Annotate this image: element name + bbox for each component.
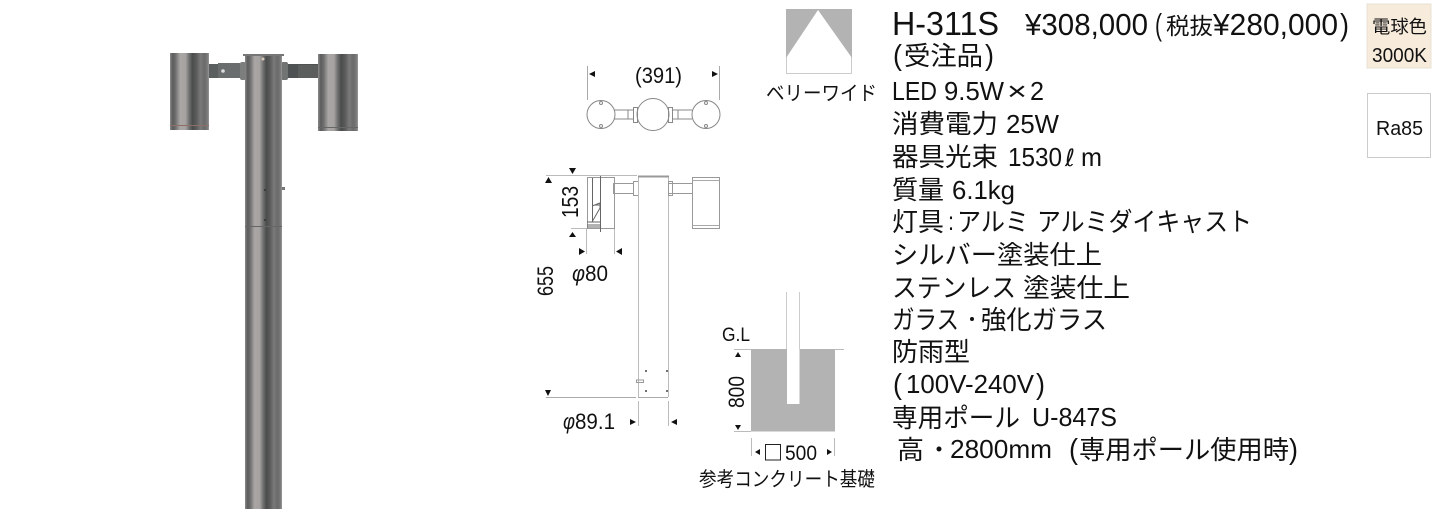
power use: 消費電力: [892, 104, 998, 141]
height: 2800mm: [950, 434, 1052, 464]
weight: 質量: [892, 170, 944, 207]
glass: ガラス: [892, 300, 959, 337]
height: [897, 430, 1298, 467]
side elevation drawing: [545, 168, 720, 426]
product photo: pole light: [170, 53, 358, 509]
wattage: LED: [892, 76, 937, 106]
finish 2: 塗装仕上: [1023, 268, 1130, 305]
material 1: [892, 202, 1252, 239]
dimension: 655: 655: [533, 266, 558, 296]
dimension: phi 80: 80: [585, 261, 608, 286]
model and price: ¥308,000: [1024, 7, 1148, 42]
label: G.L: G.L: [722, 325, 750, 346]
model and price: (: [1155, 7, 1162, 42]
luminous flux: ℓ: [1064, 144, 1075, 172]
model and price: [892, 5, 1349, 42]
beam angle label: ベリーワイド: [766, 83, 877, 105]
voltage: 100V-240V: [906, 369, 1035, 399]
concrete block: [751, 349, 835, 432]
finish 2: [892, 268, 1130, 305]
dedicated pole: 専用ポール: [892, 398, 1020, 435]
material 1: 灯具: [892, 202, 944, 239]
voltage: ): [1036, 369, 1045, 401]
material 1: アルミ: [957, 202, 1029, 239]
model and price: H-311S: [892, 5, 999, 42]
left lamp head: [170, 53, 209, 130]
wattage: 2: [1030, 76, 1044, 106]
dedicated pole: [892, 398, 1117, 435]
right lamp head: [318, 54, 358, 131]
icon: beam angle: [786, 9, 852, 74]
glass: 強化ガラス: [981, 300, 1107, 337]
foundation caption: 参考コンクリート基礎: [699, 468, 875, 491]
luminous flux: 1530: [1008, 142, 1062, 172]
foundation drawing: [734, 292, 844, 460]
material 1: アルミダイキャスト: [1037, 202, 1252, 239]
weight: 6.1kg: [952, 175, 1015, 205]
badge: colour temperature: 3000K: [1372, 45, 1428, 67]
dedicated pole: U-847S: [1032, 402, 1117, 432]
wattage: ×: [1007, 76, 1027, 106]
height: ): [1289, 434, 1298, 466]
top view drawing: [587, 66, 720, 130]
made to order: 受注品: [904, 36, 983, 73]
glass: [892, 300, 1107, 337]
luminous flux: [892, 137, 1102, 174]
weight: [892, 170, 1015, 207]
model and price: ): [1340, 7, 1349, 42]
finish 2: ステンレス: [892, 268, 1016, 305]
luminous flux: m: [1081, 142, 1102, 172]
wattage: 9.5W: [944, 76, 1004, 106]
made to order: ): [985, 40, 994, 72]
made to order: (: [893, 40, 902, 72]
rainproof: 防雨型: [892, 332, 970, 369]
dimension: phi 89.1: φ: [563, 409, 575, 434]
height: 高: [897, 430, 924, 467]
pole: [243, 54, 285, 509]
material 1: :: [948, 206, 954, 236]
pole socket: [786, 292, 800, 404]
height: (: [1069, 434, 1078, 466]
left arm: [208, 62, 246, 80]
dimension: phi 89.1: 89.1: [575, 409, 615, 434]
power use: [892, 104, 1059, 141]
badge: colour temperature: [1367, 4, 1431, 68]
height: 専用ポール使用時: [1079, 430, 1289, 467]
dimension: 391: (391): [635, 63, 682, 88]
model and price: 税抜: [1166, 13, 1213, 39]
voltage: (: [893, 369, 902, 401]
spec text block: [892, 5, 1349, 467]
badge: Ra85: [1368, 94, 1430, 158]
dimension: phi 80: [572, 261, 608, 286]
luminous flux: 器具光束: [892, 137, 998, 174]
dimension: 153: 153: [557, 186, 583, 218]
dimension: phi 80: φ: [572, 261, 585, 286]
badge: Ra85: Ra85: [1376, 118, 1423, 140]
finish 1: シルバー塗装仕上: [892, 235, 1102, 272]
wattage: [892, 76, 1044, 106]
power use: 25W: [1006, 109, 1059, 139]
dimension: 800: 800: [724, 376, 749, 408]
model and price: ¥280,000: [1212, 7, 1338, 42]
right arm: [281, 62, 319, 80]
badge: colour temperature: 電球色: [1372, 17, 1427, 37]
dimension: 500: 500: [785, 442, 817, 465]
